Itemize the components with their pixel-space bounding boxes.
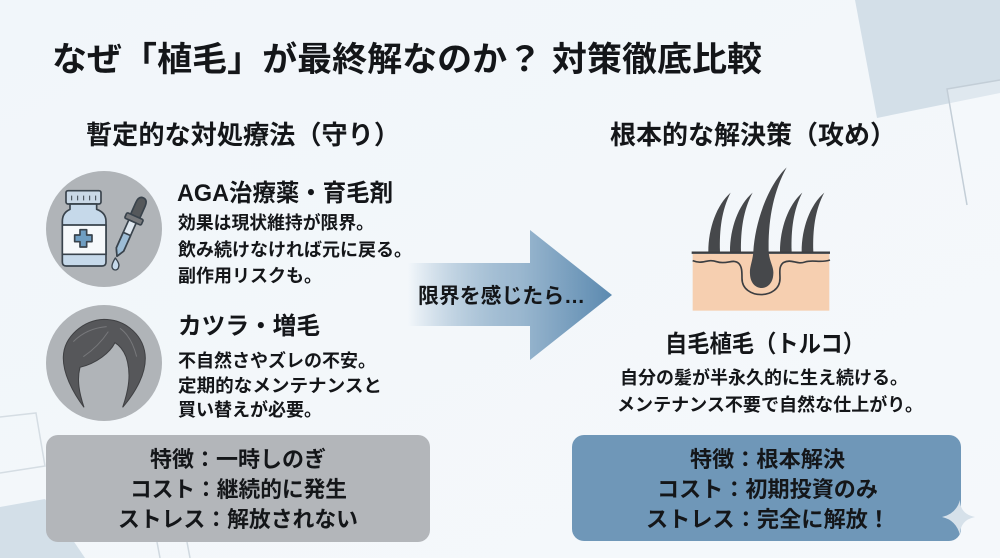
text block: AGA medicine [177,180,412,286]
text block: AGA medicine: AGA治療薬・育毛剤 [177,180,393,207]
panel: right summary: 特徴：根本解決 [690,447,845,472]
text block: AGA medicine: 副作用リスクも。 [178,266,322,286]
panel: left summary [46,435,430,542]
panel: left summary: コスト：継続的に発生 [130,477,347,502]
icon: wig [46,305,162,421]
icon: sparkle [942,500,975,535]
title: なぜ「植毛」が最終解なのか？ 対策徹底比較 [52,40,762,79]
panel: right summary: コスト：初期投資のみ [657,477,878,502]
panel: left summary: ストレス：解放されない [118,507,358,532]
icon: hair follicle [692,167,830,311]
text block: own-hair transplant [617,331,923,415]
text block: own-hair transplant: 自毛植毛（トルコ） [665,331,865,358]
panel: left summary: 特徴：一時しのぎ [150,447,326,472]
text block: wigs and extensions: 定期的なメンテナンスと [178,376,382,396]
text block: wigs and extensions: 不自然さやズレの不安。 [178,350,376,371]
icon: medicine bottle and dropper [46,171,162,287]
text block: wigs and extensions [178,313,382,420]
arrow [408,230,612,360]
text block: own-hair transplant: 自分の髪が半永久的に生え続ける。 [620,367,908,388]
text block: wigs and extensions: カツラ・増毛 [178,313,320,340]
panel: right summary: ストレス：完全に解放！ [646,507,890,532]
arrow: 限界を感じたら… [418,284,585,308]
heading: fundamental solution: 根本的な解決策（攻め） [610,120,896,150]
text block: AGA medicine: 効果は現状維持が限界。 [178,212,374,233]
panel: right summary [572,435,961,541]
heading: temporary measures: 暫定的な対処療法（守り） [86,120,400,150]
text block: wigs and extensions: 買い替えが必要。 [178,399,322,420]
text block: AGA medicine: 飲み続けなければ元に戻る。 [178,239,412,260]
text block: own-hair transplant: メンテナンス不要で自然な仕上がり。 [617,394,923,415]
